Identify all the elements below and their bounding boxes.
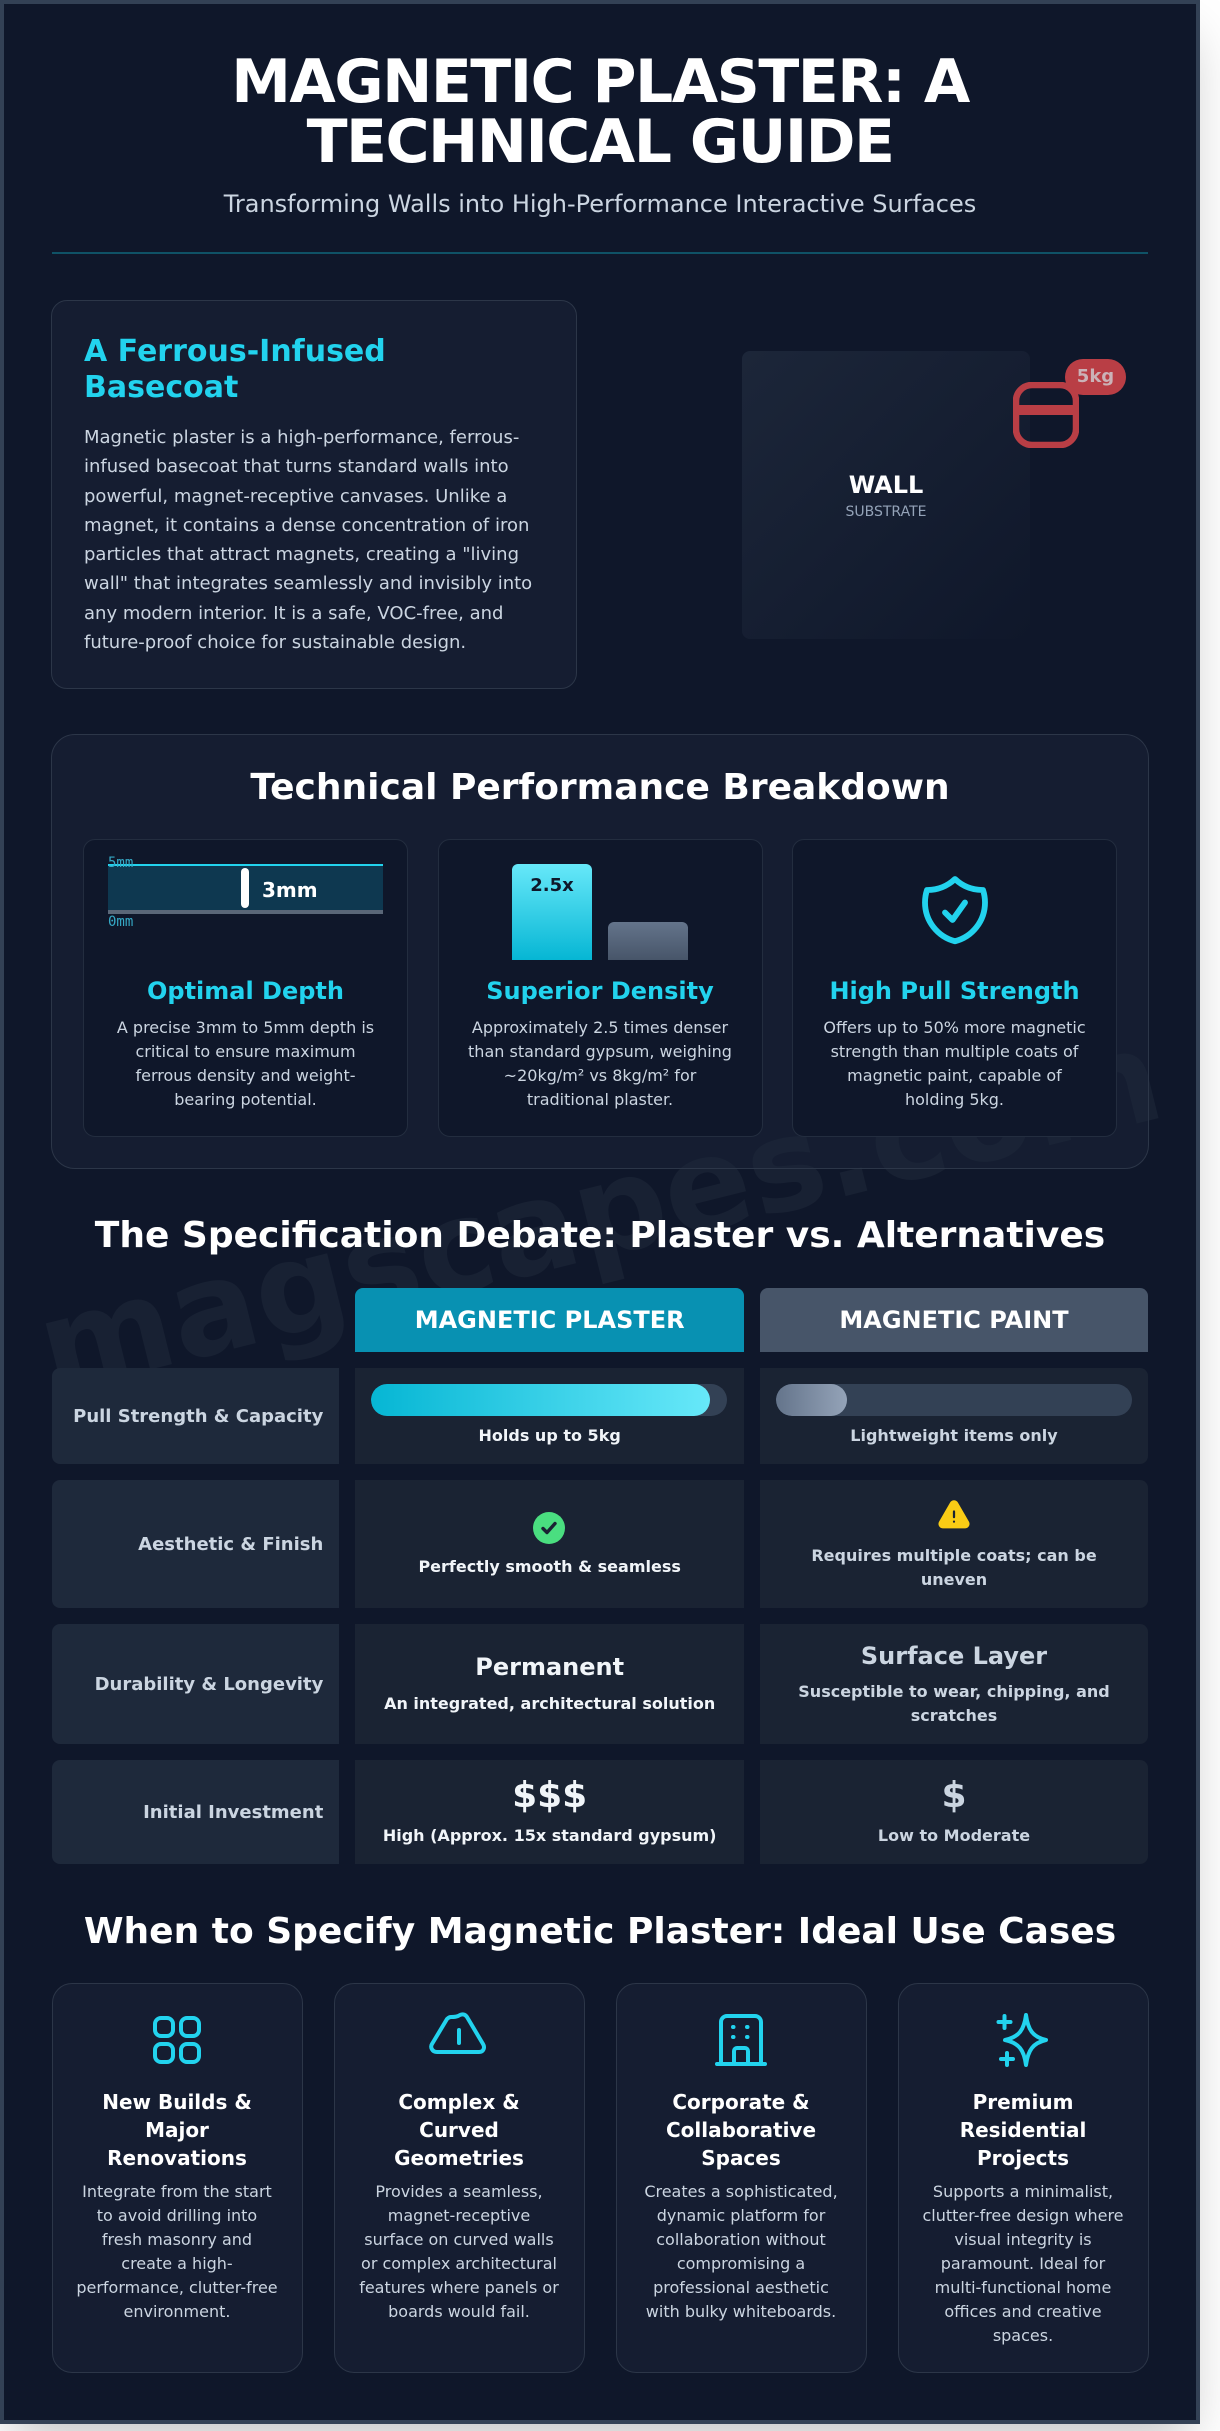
title: [231, 47, 970, 177]
depth diagram: [108, 855, 383, 930]
card text: [644, 2182, 838, 2321]
card title: Premium: [973, 2090, 1073, 2114]
card text: magnet-receptive: [388, 2206, 530, 2225]
value text: uneven: [921, 1570, 987, 1589]
table header: magnetic paint: [760, 1288, 1148, 1352]
value text: Lightweight items only: [850, 1426, 1058, 1445]
value heading: Surface Layer: [861, 1642, 1047, 1670]
card title: [102, 2090, 252, 2170]
value text: Requires multiple coats; can be: [811, 1546, 1097, 1565]
icon: curved triangle: [429, 2012, 486, 2054]
watermark: magscapes.com: [24, 1001, 1176, 1424]
card text: offices and creative: [944, 2302, 1102, 2321]
plaster pull strength: [355, 1368, 744, 1464]
card text: environment.: [124, 2302, 230, 2321]
card title: Complex &: [398, 2090, 520, 2114]
icon: green check: [533, 1512, 565, 1544]
row label: investment: [52, 1760, 339, 1864]
value heading: Permanent: [475, 1653, 624, 1681]
intro text: powerful, magnet-receptive canvases. Unlike a: [84, 486, 507, 506]
card text: or complex architectural: [361, 2254, 557, 2273]
card text: ~20kg/m² vs 8kg/m² for: [504, 1066, 696, 1085]
card title: Optimal Depth: [147, 977, 344, 1005]
value text: Susceptible to wear, chipping, and: [798, 1682, 1110, 1701]
card text: [76, 2182, 278, 2321]
row label: pull strength: [52, 1368, 339, 1464]
intro text: particles that attract magnets, creating a "living: [84, 544, 519, 565]
card text: compromising a: [677, 2254, 805, 2273]
panel: intro basecoat: [51, 300, 577, 689]
value text: Low to Moderate: [878, 1826, 1030, 1845]
card text: create a high-: [121, 2254, 233, 2273]
subtitle: Transforming Walls into High-Performance Interactive Surfaces: [224, 190, 976, 218]
intro text: magnet, it contains a dense concentration of iron: [84, 515, 529, 536]
table header: magnetic paint: MAGNETIC PAINT: [839, 1306, 1069, 1334]
0mm label: 0mm: [108, 914, 133, 930]
intro text: Magnetic plaster is a high-performance, ferrous-: [84, 427, 519, 448]
intro text: any modern interior. It is a safe, VOC-free, and: [84, 602, 503, 624]
card text: ferrous density and weight-: [135, 1066, 356, 1085]
progress bar: 95%: [371, 1384, 727, 1416]
wall substrate: [742, 351, 1030, 639]
row label: durability: [52, 1624, 339, 1744]
card text: A precise 3mm to 5mm depth is: [117, 1018, 374, 1037]
card text: bearing potential.: [174, 1090, 317, 1109]
card title: Residential: [960, 2118, 1086, 2142]
title: MAGNETIC PLASTER: A: [231, 47, 969, 117]
bar: plaster 2.5x: [512, 864, 592, 960]
intro heading: Basecoat: [84, 370, 238, 405]
value text: scratches: [911, 1706, 997, 1725]
bar: gypsum: [608, 922, 688, 960]
icon: building: [715, 2014, 767, 2066]
card: optimal depth: [83, 839, 408, 1137]
intro text: wall" that integrates seamlessly and invisibly into: [84, 573, 532, 594]
card title: [666, 2090, 816, 2170]
card title: Collaborative: [666, 2118, 816, 2142]
card text: [117, 1018, 374, 1109]
table header: magnetic plaster: [355, 1288, 744, 1352]
row label: aesthetic: [52, 1480, 339, 1608]
card text: surface on curved walls: [364, 2230, 554, 2249]
card title: [960, 2090, 1086, 2170]
card text: [922, 2182, 1124, 2345]
card text: dynamic platform for: [657, 2206, 825, 2225]
card text: Provides a seamless,: [375, 2182, 543, 2201]
intro text: future-proof choice for sustainable design.: [84, 632, 466, 653]
card text: [359, 2182, 559, 2321]
card: corporate spaces: [616, 1983, 866, 2373]
card: superior density: [438, 839, 762, 1137]
value text: [811, 1546, 1097, 1589]
card text: features where panels or: [359, 2278, 559, 2297]
plaster durability: [355, 1624, 744, 1744]
card title: New Builds &: [102, 2090, 252, 2114]
substrate label: SUBSTRATE: [846, 504, 926, 520]
card text: performance, clutter-free: [76, 2278, 278, 2297]
table header: magnetic plaster: MAGNETIC PLASTER: [415, 1306, 685, 1334]
value text: High (Approx. 15x standard gypsum): [383, 1826, 716, 1845]
card text: Supports a minimalist,: [933, 2182, 1113, 2201]
plaster investment: [355, 1760, 744, 1864]
icon: grid squares: [153, 2016, 201, 2064]
card: premium residential: [898, 1983, 1148, 2373]
card text: [823, 1018, 1086, 1109]
card text: multi-functional home: [935, 2278, 1111, 2297]
card title: Spaces: [701, 2146, 781, 2170]
intro heading: A Ferrous-Infused: [84, 334, 386, 369]
card text: spaces.: [993, 2326, 1053, 2345]
card text: strength than multiple coats of: [831, 1042, 1078, 1061]
card title: Geometries: [394, 2146, 524, 2170]
card text: Integrate from the start: [82, 2182, 272, 2201]
bar: plaster 2.5x: 2.5x: [530, 875, 574, 896]
card text: magnetic paint, capable of: [847, 1066, 1062, 1085]
card title: Curved: [419, 2118, 499, 2142]
intro heading: [84, 334, 386, 405]
depth marker: [241, 868, 249, 908]
wall label: WALL: [849, 471, 923, 499]
icon: sparkles: [996, 2013, 1048, 2067]
card text: Offers up to 50% more magnetic: [823, 1018, 1086, 1037]
icon: warning: [938, 1500, 970, 1528]
card text: to avoid drilling into: [97, 2206, 257, 2225]
card text: traditional plaster.: [527, 1090, 673, 1109]
intro text: infused basecoat that turns standard walls into: [84, 456, 509, 477]
card text: boards would fail.: [388, 2302, 530, 2321]
value text: [798, 1682, 1110, 1725]
paint pull strength: [760, 1368, 1148, 1464]
card: new builds: [52, 1983, 302, 2373]
paint durability: [760, 1624, 1148, 1744]
price symbol: $: [941, 1775, 967, 1816]
5mm label: 5mm: [108, 855, 133, 871]
card text: holding 5kg.: [905, 1090, 1004, 1109]
wall diagram: [742, 351, 1126, 616]
card text: clutter-free design where: [922, 2206, 1124, 2225]
card text: [468, 1018, 732, 1109]
depth band: [108, 864, 383, 914]
card: complex geometries: [334, 1983, 584, 2373]
card title: [394, 2090, 524, 2170]
icon: magnet: [1013, 382, 1079, 448]
card title: Major: [145, 2118, 209, 2142]
card text: Creates a sophisticated,: [644, 2182, 838, 2201]
card text: paramount. Ideal for: [941, 2254, 1105, 2273]
plaster aesthetic: [355, 1480, 744, 1608]
card title: High Pull Strength: [829, 977, 1080, 1005]
badge: 5kg: 5kg: [1077, 366, 1114, 387]
card text: fresh masonry and: [102, 2230, 252, 2249]
value text: Perfectly smooth & seamless: [418, 1557, 681, 1576]
card title: Corporate &: [672, 2090, 810, 2114]
value text: Holds up to 5kg: [479, 1426, 621, 1445]
bar chart: density: [512, 864, 688, 960]
heading: technical performance: Technical Performance Breakdown: [250, 767, 950, 808]
3mm label: 3mm: [262, 878, 318, 902]
heading: specification debate: The Specification Debate: Plaster vs. Alternatives: [95, 1215, 1105, 1256]
card text: than standard gypsum, weighing: [468, 1042, 732, 1061]
paint aesthetic: [760, 1480, 1148, 1608]
paint investment: [760, 1760, 1148, 1864]
card text: visual integrity is: [954, 2230, 1092, 2249]
card title: Projects: [977, 2146, 1069, 2170]
row label: pull strength: Pull Strength & Capacity: [73, 1406, 323, 1426]
card text: professional aesthetic: [653, 2278, 829, 2297]
card title: Renovations: [107, 2146, 247, 2170]
card text: Approximately 2.5 times denser: [472, 1018, 728, 1037]
progress bar: 20%: [776, 1384, 1132, 1416]
card title: Superior Density: [486, 977, 714, 1005]
row label: durability: Durability & Longevity: [95, 1674, 323, 1694]
intro text: [84, 427, 532, 653]
row label: investment: Initial Investment: [143, 1802, 323, 1822]
value text: An integrated, architectural solution: [384, 1694, 715, 1713]
card: high pull strength: [792, 839, 1117, 1137]
card text: with bulky whiteboards.: [646, 2302, 836, 2321]
badge: 5kg: [1065, 359, 1126, 395]
row label: aesthetic: Aesthetic & Finish: [138, 1534, 323, 1554]
icon: shield check: [922, 876, 988, 944]
panel: technical performance: [51, 734, 1149, 1169]
heading: use cases: When to Specify Magnetic Plaster: Ideal Use Cases: [84, 1911, 1116, 1952]
card text: critical to ensure maximum: [135, 1042, 356, 1061]
card text: collaboration without: [656, 2230, 826, 2249]
title: TECHNICAL GUIDE: [307, 107, 893, 177]
price symbol: $$$: [512, 1775, 587, 1816]
